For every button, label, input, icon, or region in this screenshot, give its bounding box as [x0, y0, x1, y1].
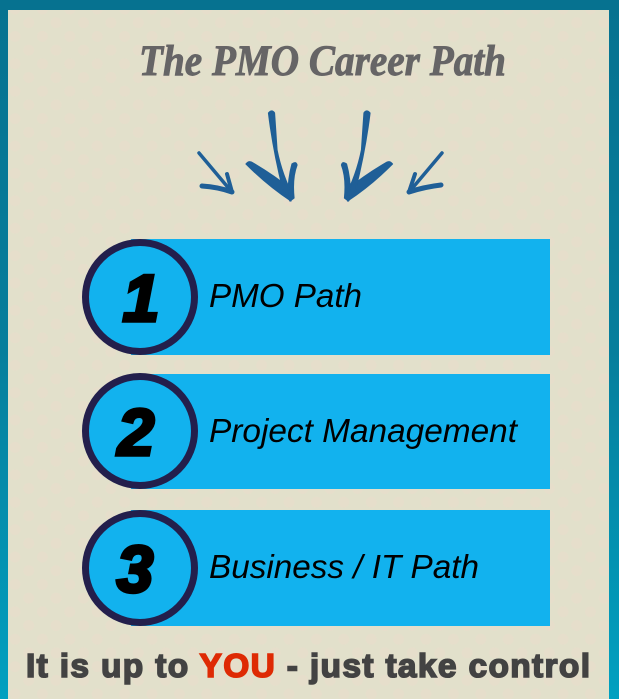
arrow: right large — [342, 111, 392, 201]
number badge 1: 1 — [123, 261, 159, 335]
number badge 2 — [86, 376, 194, 486]
arrow: far left small — [199, 153, 232, 192]
row 2: Project Management — [86, 374, 550, 489]
number badge 3: 3 — [117, 532, 153, 606]
row 1: PMO Path — [86, 239, 550, 355]
arrow: left large — [246, 111, 297, 201]
label: PMO Path — [209, 277, 362, 314]
label: Business / IT Path — [209, 548, 479, 585]
number badge 1 — [86, 242, 194, 352]
label: Project Management — [209, 412, 519, 449]
arrow: far right small — [409, 153, 442, 192]
bar — [131, 510, 550, 626]
title: The PMO Career Path — [139, 38, 506, 85]
bar — [131, 239, 550, 355]
number badge 2: 2 — [116, 395, 155, 469]
row 3: Business / IT Path — [86, 510, 550, 626]
icon: four hand-drawn arrows — [199, 111, 442, 201]
bar — [131, 374, 550, 489]
closing message: It is up to YOU - just take control — [26, 648, 590, 685]
number badge 3 — [86, 514, 194, 622]
